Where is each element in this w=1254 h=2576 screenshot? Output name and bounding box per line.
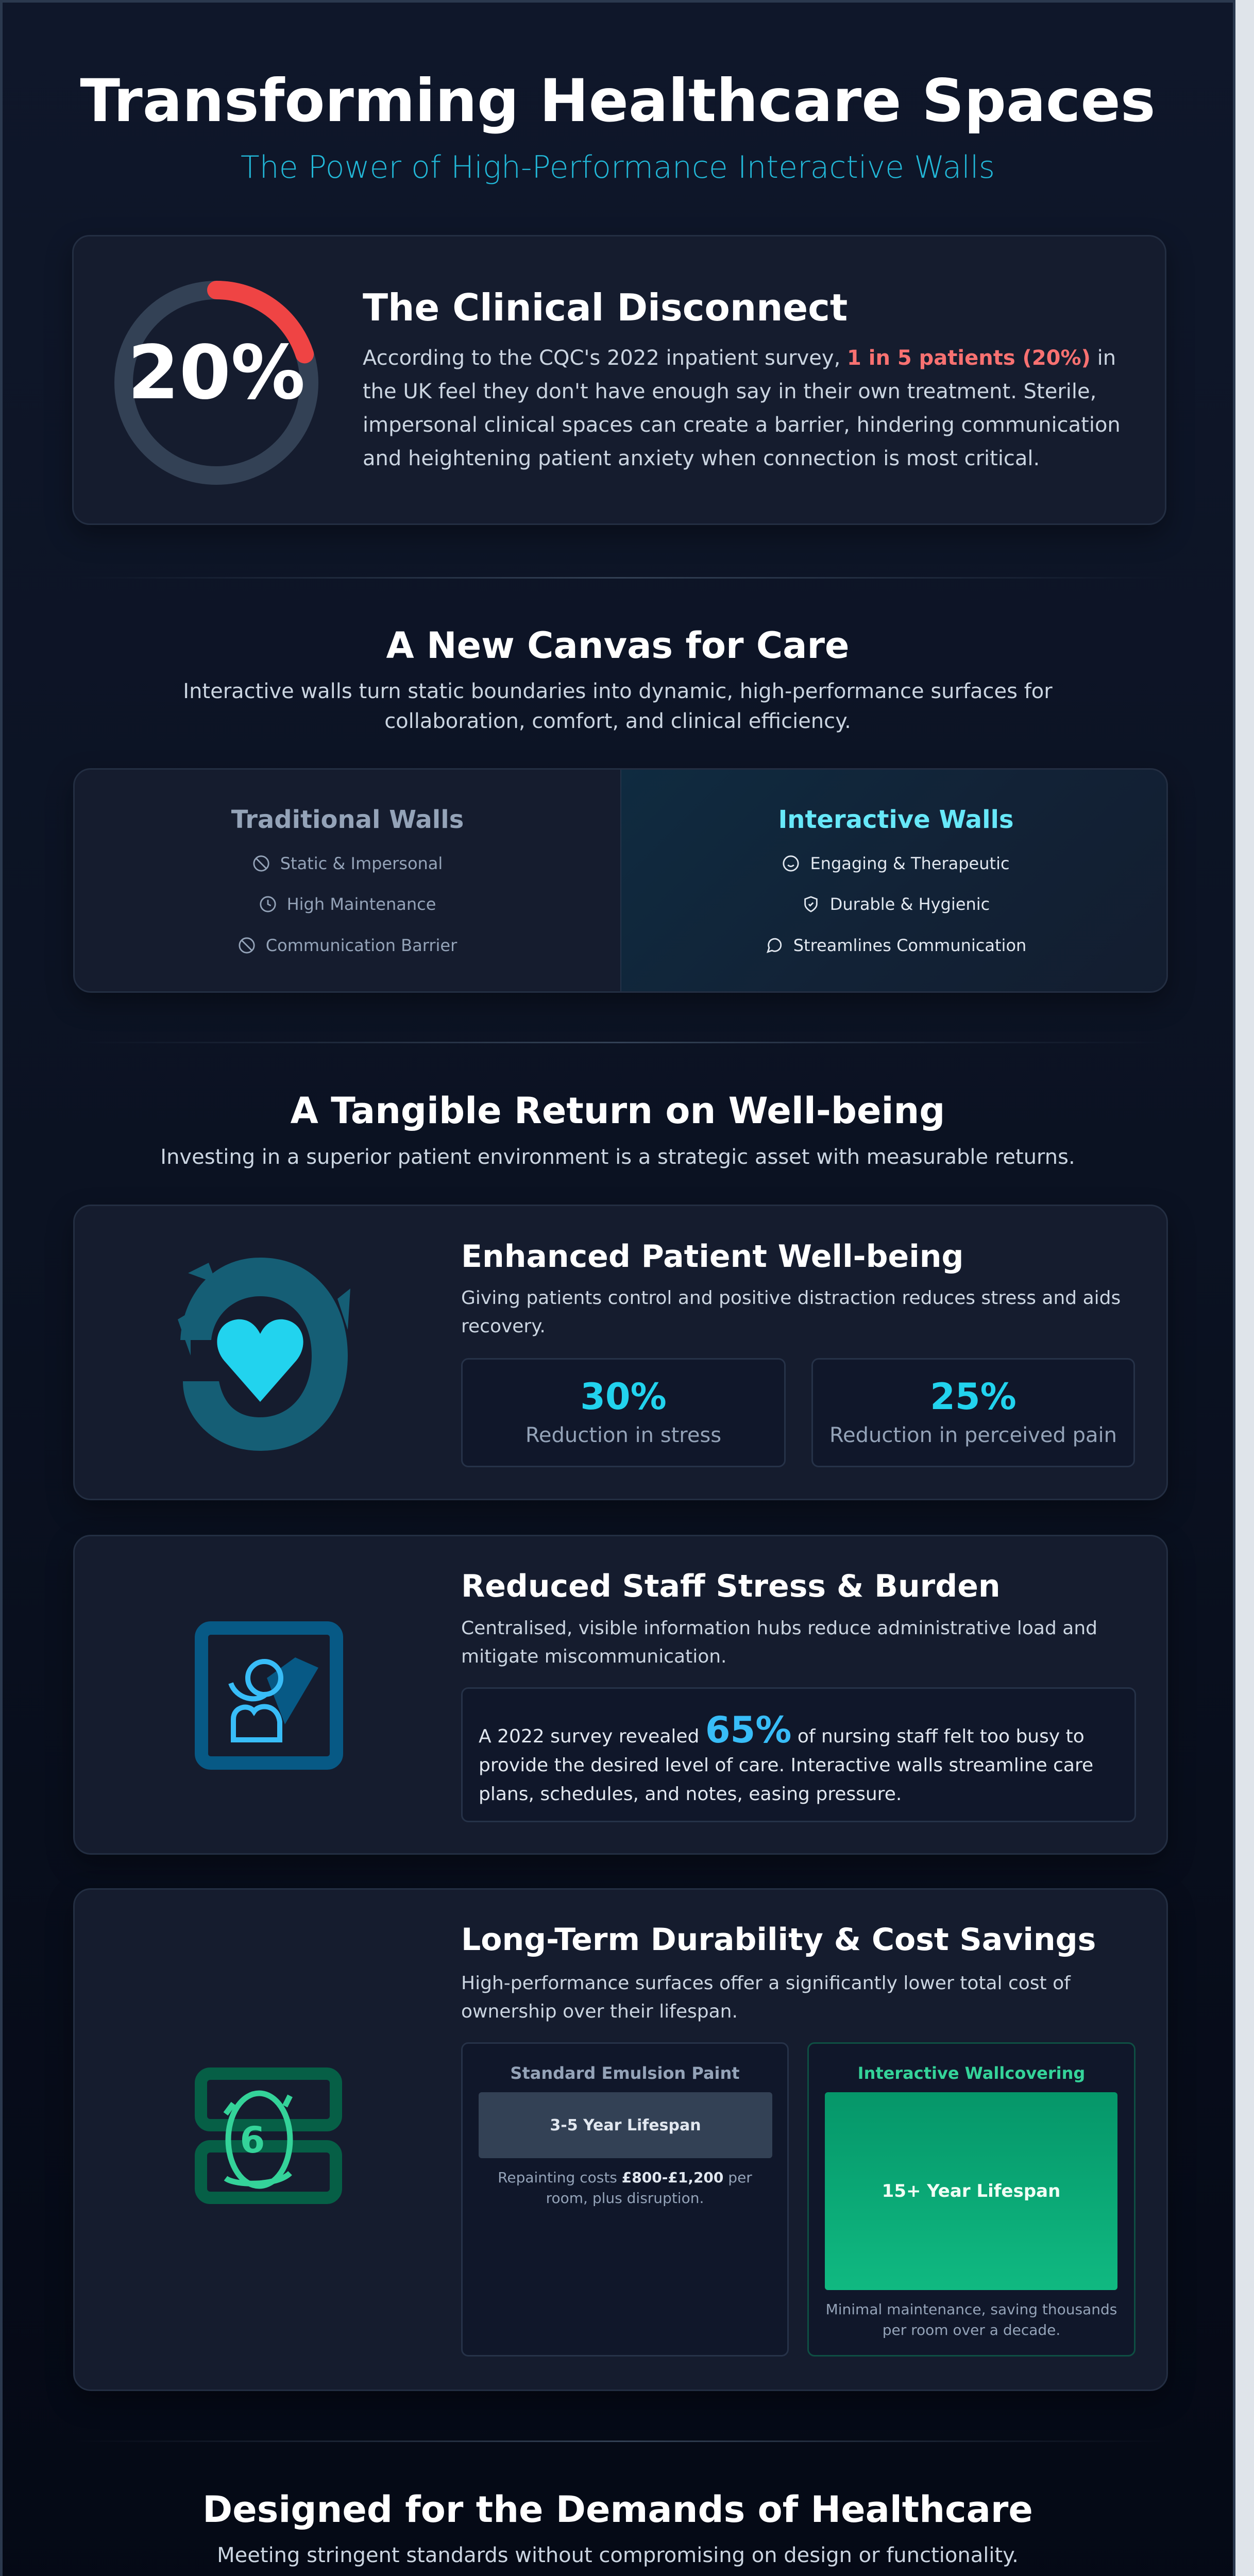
panel: durability	[73, 1888, 1168, 2391]
paragraph: According to the CQC's 2022 inpatient survey, 1 in 5 patients (20%) in the UK feel they don't have enough say in their own treatment. Sterile, impersonal clinical spaces can create a barrier, hindering communication and heightening patient anxiety when connection is most critical.	[363, 346, 1121, 470]
panel: staff stress	[73, 1535, 1168, 1855]
column: traditional walls: High Maintenance	[287, 894, 436, 914]
callout: 65%	[461, 1687, 1136, 1822]
donut chart 20%	[114, 281, 318, 485]
heading: The Clinical Disconnect	[363, 286, 848, 329]
panel: clinical disconnect	[72, 235, 1166, 525]
heading: Long-Term Durability & Cost Savings	[461, 1922, 1096, 1958]
bar: 15+ years	[825, 2092, 1117, 2290]
column: traditional walls: Communication Barrier	[266, 936, 457, 955]
comparison: standard paint: Standard Emulsion Paint	[510, 2063, 740, 2083]
comparison: standard paint	[461, 2042, 789, 2357]
heading: new canvas: A New Canvas for Care	[386, 624, 850, 667]
subtitle: The Power of High-Performance Interactive Walls	[241, 149, 995, 185]
stat: 25%: 25%	[930, 1376, 1016, 1418]
paragraph: Centralised, visible information hubs reduce administrative load and mitigate miscommunication.	[461, 1618, 1097, 1667]
heading: Enhanced Patient Well-being	[461, 1239, 963, 1275]
icon: heart in ring	[178, 1258, 350, 1451]
heading: demands of healthcare: Designed for the Demands of Healthcare	[202, 2488, 1033, 2531]
panel: patient well-being	[73, 1205, 1168, 1500]
stat: 25%: Reduction in perceived pain	[829, 1423, 1117, 1447]
title: Transforming Healthcare Spaces	[80, 66, 1156, 135]
column: interactive walls	[620, 770, 1170, 994]
column: interactive walls: Durable & Hygienic	[830, 894, 990, 914]
stat: 30%: Reduction in stress	[526, 1423, 721, 1447]
heading: tangible return: A Tangible Return on Well-being	[291, 1090, 945, 1132]
comparison: interactive wallcovering	[807, 2042, 1136, 2357]
column: interactive walls: Streamlines Communication	[793, 936, 1026, 955]
column: traditional walls: Traditional Walls	[231, 805, 464, 834]
icon: cost savings	[195, 2067, 342, 2204]
text: demands intro: Meeting stringent standards without compromising on design or functionality.	[217, 2544, 1019, 2567]
icon: staff board	[195, 1621, 343, 1770]
bar: 15+ years: 15+ Year Lifespan	[882, 2181, 1060, 2201]
donut label: 20%	[128, 329, 305, 416]
stat: 30%	[461, 1358, 786, 1467]
stat: 30%: 30%	[580, 1376, 667, 1418]
paragraph: Giving patients control and positive distraction reduces stress and aids recovery.	[461, 1287, 1121, 1337]
heading: Reduced Staff Stress & Burden	[461, 1568, 1001, 1604]
bar: 3-5 years: 3-5 Year Lifespan	[550, 2116, 701, 2134]
column: traditional walls: Static & Impersonal	[280, 854, 443, 873]
column: interactive walls: Engaging & Therapeutic	[810, 854, 1010, 873]
comparison: interactive wallcovering: Interactive Wallcovering	[858, 2063, 1085, 2083]
stat: 25%	[811, 1358, 1135, 1467]
column: interactive walls: Interactive Walls	[778, 805, 1014, 834]
bar: 3-5 years	[479, 2092, 772, 2158]
icon: cost savings: 6	[240, 2119, 265, 2161]
comparison: standard paint: Repainting costs £800-£1,200 per room, plus disruption.	[498, 2169, 752, 2207]
callout: 65%: A 2022 survey revealed 65% of nursing staff felt too busy to provide the desired level of care. Interactive walls streamline care plans, schedules, and notes, easing pressure.	[479, 1709, 1093, 1805]
panel: comparison	[73, 768, 1168, 993]
text: new canvas intro: Interactive walls turn static boundaries into dynamic, high-performance surfaces for collaboration, comfort, and clinical efficiency.	[183, 680, 1053, 733]
paragraph: High-performance surfaces offer a significantly lower total cost of ownership over their lifespan.	[461, 1973, 1071, 2022]
comparison: interactive wallcovering: Minimal maintenance, saving thousands per room over a decade.	[826, 2301, 1117, 2338]
text: tangible return intro: Investing in a superior patient environment is a strategic asset with measurable returns.	[160, 1145, 1075, 1169]
column: traditional walls	[231, 805, 464, 955]
